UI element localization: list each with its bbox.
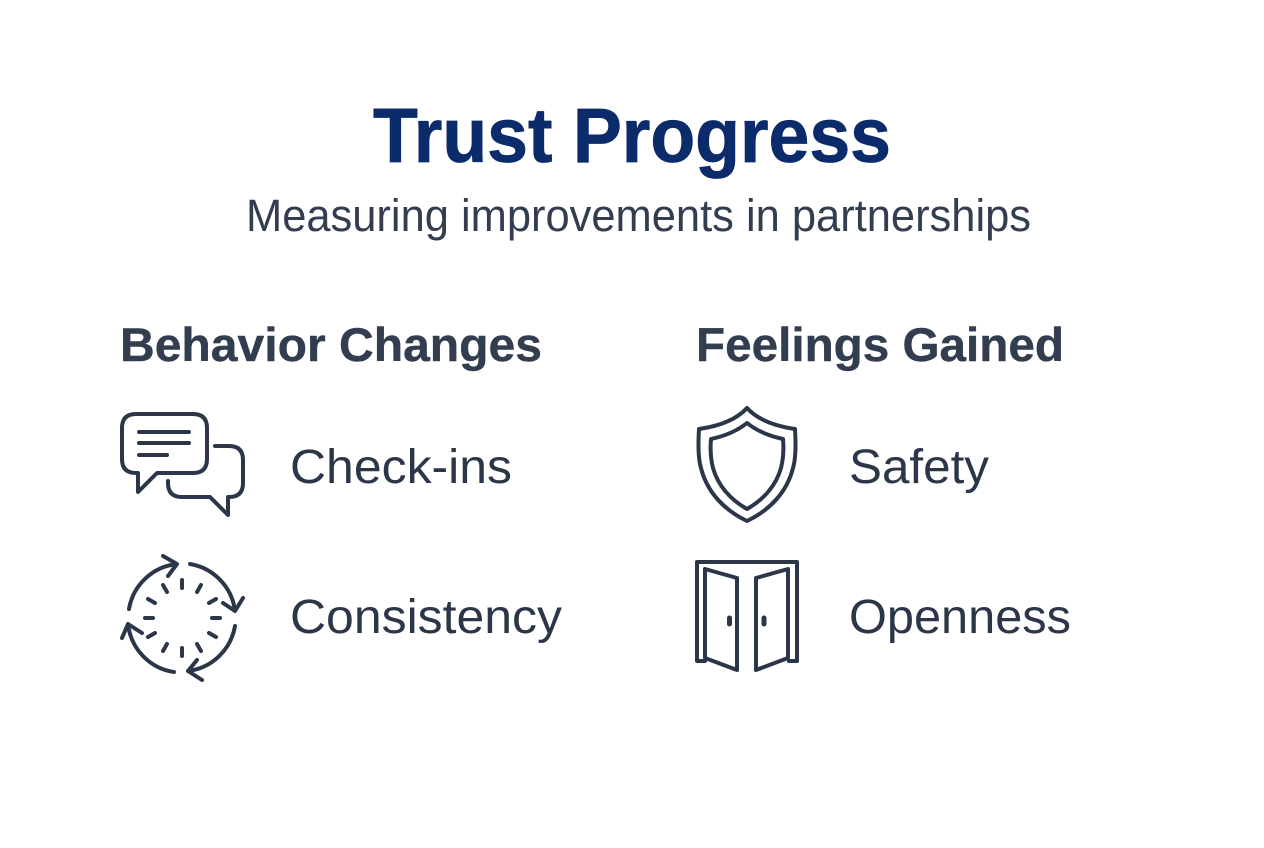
- label: safety: Safety: [849, 441, 989, 494]
- panel: behavior changes: [120, 318, 562, 680]
- heading: feelings gained: Feelings Gained: [696, 318, 1064, 371]
- label: check-ins: Check-ins: [290, 441, 512, 494]
- heading: behavior changes: Behavior Changes: [120, 318, 542, 371]
- title: Trust Progress: [373, 93, 891, 179]
- label: consistency: Consistency: [290, 591, 562, 644]
- icon: open doors: [697, 562, 797, 670]
- label: openness: Openness: [849, 591, 1071, 644]
- icon: shield: [698, 408, 796, 521]
- icon: chat bubbles: [122, 414, 243, 515]
- icon: cycle arrows: [122, 556, 243, 680]
- panel: feelings gained: [696, 318, 1071, 670]
- subtitle: Measuring improvements in partnerships: [246, 190, 1031, 241]
